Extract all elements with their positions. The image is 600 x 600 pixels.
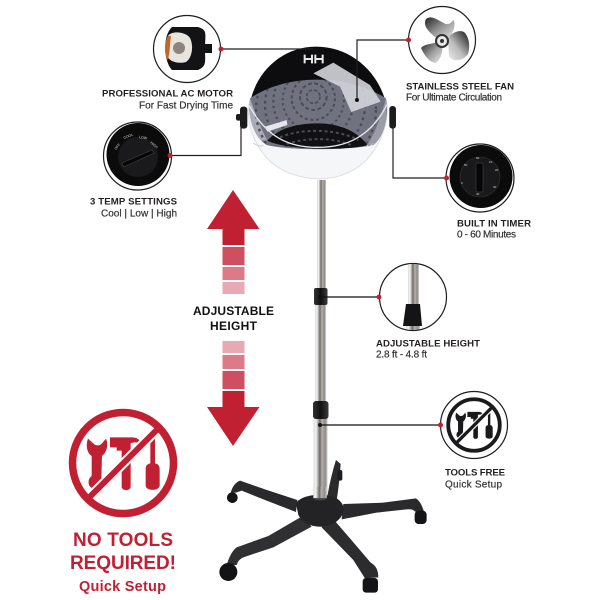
visor reflection (313, 63, 381, 112)
callout: professional ac motor: For Fast Drying Time (139, 100, 233, 112)
timer dial: 0 (461, 181, 463, 185)
callout: temp settings: Cool | Low | High (101, 208, 177, 220)
lower black grill (267, 123, 367, 149)
lower pole (315, 304, 326, 402)
base legs (219, 481, 427, 593)
temperature dial: LOW (139, 135, 148, 140)
callout: temp settings (90, 122, 241, 220)
temperature dial: COOL (123, 133, 134, 140)
icon: no tools small (448, 399, 500, 451)
heading: adjustable height: ADJUSTABLE (193, 304, 274, 318)
upper collar (314, 288, 328, 305)
connector line (320, 296, 379, 298)
temperature dial (104, 122, 172, 190)
clear visor rim (248, 104, 387, 147)
timer dial (446, 144, 514, 212)
timer dial: 40 (476, 192, 480, 196)
brand logo (305, 55, 323, 63)
hood dryer (236, 47, 396, 179)
callout: built in timer (393, 125, 531, 240)
connector line (170, 125, 241, 156)
temperature dial: OFF (114, 143, 121, 151)
timer dial: 30 (493, 185, 497, 189)
callout: stainless steel fan: For Ultimate Circulation (406, 92, 502, 104)
bottom pole (314, 416, 328, 496)
heading: adjustable height (193, 304, 274, 333)
callout: built in timer: 0 - 60 Minutes (457, 230, 516, 240)
label: BUILT IN TIMER (457, 218, 531, 230)
no tools text: NO TOOLS (73, 530, 173, 551)
icon: pole collar (403, 262, 422, 332)
connector line (320, 424, 440, 426)
icon: motor (165, 27, 212, 70)
dome inner (249, 80, 387, 150)
stand pole and base (219, 180, 427, 593)
connector line (221, 48, 315, 50)
arrow down (207, 341, 260, 446)
timer dial: 20 (495, 168, 499, 172)
casters (219, 492, 427, 593)
no tools required badge (70, 412, 176, 595)
upper pole (317, 180, 326, 290)
black dome (251, 47, 385, 100)
timer dial: 50 (464, 163, 468, 167)
connector line (357, 40, 408, 100)
side knobs (236, 106, 396, 129)
label: PROFESSIONAL AC MOTOR (102, 88, 233, 100)
callout: tools free: Quick Setup (445, 480, 502, 490)
callout: stainless steel fan (355, 6, 514, 104)
no tools required badge: REQUIRED! (70, 553, 176, 574)
icon: no tools (72, 412, 174, 514)
callout: professional ac motor (102, 16, 317, 112)
callout: tools free (318, 392, 508, 490)
label: ADJUSTABLE HEIGHT (376, 338, 480, 350)
timer dial: 10 (489, 160, 493, 164)
arrow up (207, 190, 260, 294)
motor circle (154, 16, 220, 82)
base rear leg (327, 460, 342, 501)
callout: adjustable height: 2.8 ft - 4.8 ft (376, 350, 427, 360)
label: TOOLS FREE (445, 468, 506, 478)
label: STAINLESS STEEL FAN (406, 82, 514, 92)
temperature dial: HIGH (149, 141, 159, 150)
height arrows (193, 190, 274, 446)
clear visor (248, 105, 387, 179)
icon: fan (421, 17, 469, 63)
no tools required badge: Quick Setup (79, 579, 166, 595)
vent pattern (254, 80, 378, 149)
lower collar (313, 401, 328, 419)
timer dial: 60 (476, 156, 480, 160)
callout: adjustable height (318, 262, 480, 360)
label: 3 TEMP SETTINGS (90, 196, 178, 208)
heading: adjustable height: HEIGHT (210, 319, 258, 333)
connector line (393, 125, 446, 178)
